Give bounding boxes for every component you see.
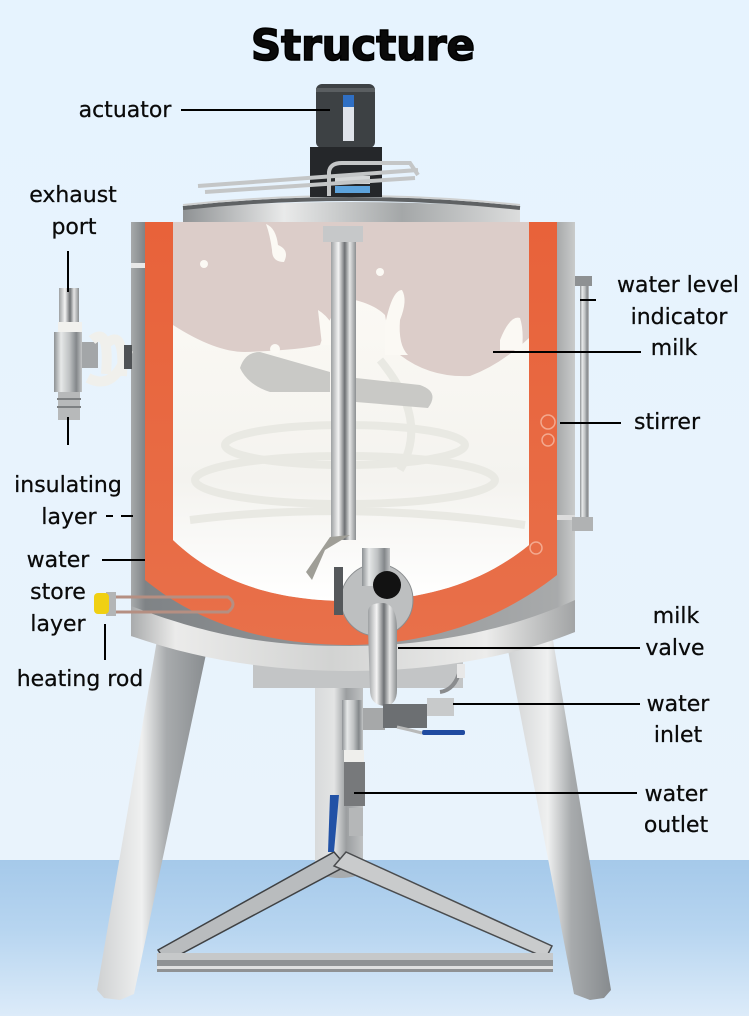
stirrer (240, 226, 432, 580)
orange water layer (145, 222, 557, 645)
lid handle (198, 163, 418, 196)
milk (173, 300, 529, 601)
right wall weld (557, 515, 575, 520)
left leg (97, 640, 209, 1000)
label: milk valve: milk (653, 604, 699, 629)
title: Structure (251, 21, 475, 71)
label: water level indicator: indicator (631, 305, 728, 330)
label: stirrer: stirrer (634, 410, 701, 435)
label: insulating layer: layer (41, 505, 98, 530)
water inlet pipe (342, 664, 465, 750)
label: heating rod: heating rod (17, 667, 143, 692)
right leg (506, 640, 611, 1000)
label: exhaust port: exhaust (29, 183, 117, 208)
label: exhaust port: port (51, 215, 97, 240)
lid (183, 196, 520, 222)
milk splashes (200, 224, 523, 355)
label: water level indicator: water level (617, 273, 739, 298)
mounting plate under tank (253, 650, 463, 688)
label: water store layer (27, 548, 90, 637)
label: actuator: actuator (79, 98, 172, 123)
label: water inlet (647, 692, 710, 748)
label: water store layer: store (30, 580, 86, 605)
heating rod (94, 592, 233, 616)
milk valve (334, 548, 413, 706)
label: water outlet: water (645, 782, 708, 807)
tank body (131, 222, 575, 671)
actuator motor (310, 84, 382, 197)
label: milk: milk (651, 336, 697, 361)
label: water level indicator (617, 273, 739, 330)
label: insulating layer (14, 473, 122, 530)
background water (0, 860, 749, 1016)
stirrer collar (323, 226, 363, 242)
label: water store layer: layer (30, 612, 87, 637)
label: water outlet: outlet (644, 813, 709, 838)
label: water outlet (644, 782, 709, 838)
stirrer paddle upper (240, 352, 432, 408)
label: milk valve (645, 604, 705, 661)
wall weld left (131, 263, 145, 268)
label: water inlet: inlet (654, 723, 703, 748)
leader lines (68, 110, 641, 793)
exhaust port assembly (54, 288, 132, 420)
triangle frame (157, 852, 553, 972)
water level indicator tube (572, 276, 593, 531)
tank interior air (173, 222, 529, 601)
label: insulating layer: insulating (14, 473, 122, 498)
label: water store layer: water (27, 548, 90, 573)
tank outer wall (131, 222, 575, 667)
milk swirls (190, 360, 525, 525)
label: milk valve: valve (645, 636, 705, 661)
stirrer paddle lower (306, 535, 350, 580)
water outlet valve (328, 750, 365, 852)
lower band (131, 600, 575, 671)
stirrer shaft (331, 240, 356, 540)
label: exhaust port (29, 183, 117, 240)
right wall droplets (530, 415, 555, 554)
label: water inlet: water (647, 692, 710, 717)
center post (315, 670, 364, 878)
